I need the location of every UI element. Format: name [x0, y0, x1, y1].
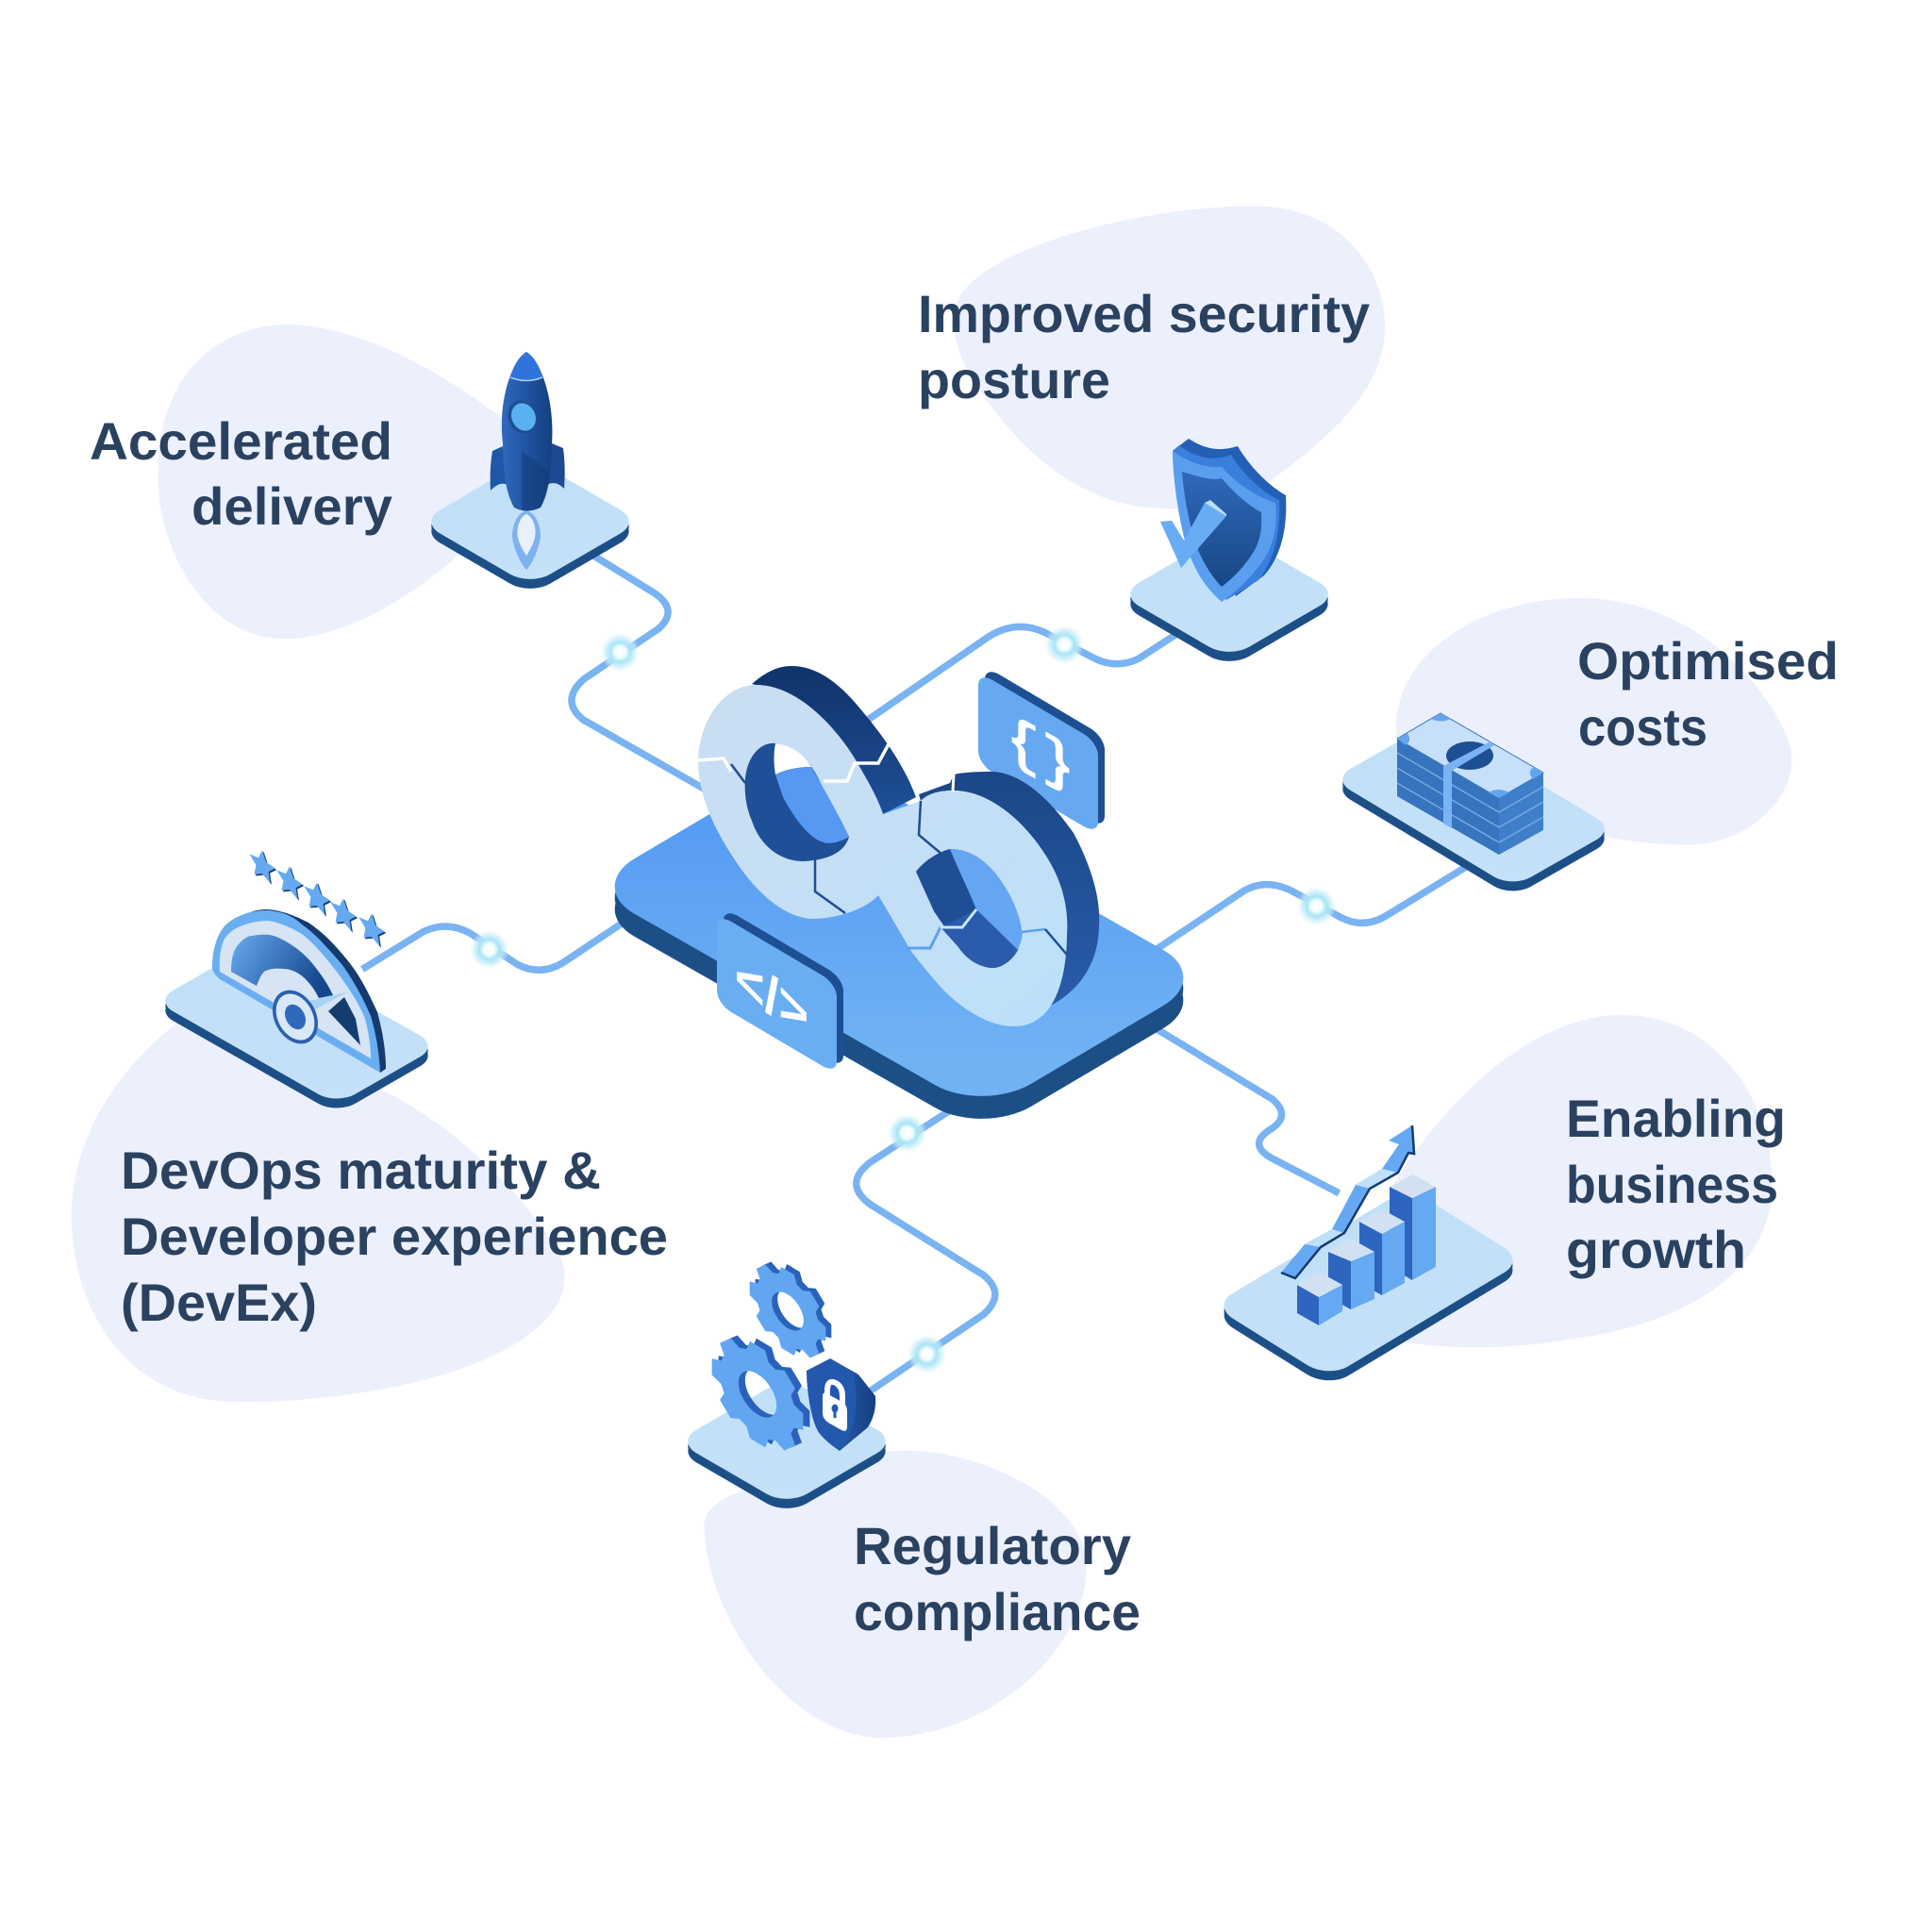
platform: rocket [420, 458, 641, 595]
gauge arc [231, 935, 333, 998]
label: devops maturity and developer experience [121, 1141, 668, 1332]
right hole platform [950, 849, 1022, 950]
infinity ring [698, 666, 1099, 1026]
gauge hub [263, 982, 327, 1052]
rocket nose [510, 352, 542, 381]
note corners [1397, 713, 1543, 798]
rocket body [502, 352, 552, 511]
note layer lines [1397, 753, 1543, 842]
upper gear [750, 1246, 831, 1374]
bar 3 [1359, 1209, 1405, 1295]
glowing nodes [470, 625, 1336, 1374]
shield check [1162, 521, 1184, 552]
rocket flame [512, 510, 541, 570]
rocket fins [491, 446, 509, 491]
connector: growth [1143, 1021, 1339, 1193]
label: enabling business growth [1566, 1089, 1786, 1279]
label: optimised costs [1577, 631, 1839, 757]
label: devops maturity and developer experience: DevOps maturity & [121, 1141, 601, 1200]
connector: shield [861, 626, 1176, 724]
padlock [827, 1382, 842, 1407]
ring back band right [919, 772, 1099, 1014]
blob: regulatory compliance [704, 1451, 1087, 1738]
right hole wall [916, 849, 1022, 968]
label: enabling business growth: growth [1566, 1220, 1746, 1279]
label: optimised costs: Optimised [1577, 631, 1839, 691]
notes left side [1397, 739, 1499, 855]
label: enabling business growth: business [1566, 1155, 1778, 1214]
platform: compliance [676, 1377, 897, 1515]
label: accelerated delivery: delivery [192, 476, 392, 536]
left hole wall [745, 743, 849, 861]
ring circuit lines [698, 741, 1067, 955]
connector: money [1143, 866, 1468, 958]
bar 4 [1390, 1174, 1436, 1280]
background blobs [72, 206, 1791, 1738]
notes right side [1499, 773, 1543, 855]
note top face [1397, 713, 1543, 798]
connector: rocket [572, 556, 715, 795]
gauge back edge [248, 909, 386, 1073]
label: devops maturity and developer experience: (DevEx) [121, 1273, 317, 1332]
left hole platform [775, 767, 849, 843]
label: enabling business growth: Enabling [1566, 1089, 1786, 1148]
card: curly braces [978, 666, 1105, 835]
gauge rim [212, 910, 380, 1073]
label: improved security posture [918, 284, 1370, 409]
label: devops maturity and developer experience: Developer experience [121, 1207, 668, 1266]
label: improved security posture: posture [918, 350, 1110, 409]
icon: braces: {} [1007, 705, 1074, 806]
blob: enabling growth [1381, 1015, 1773, 1347]
icon: growth chart [1281, 1125, 1436, 1325]
icon: banknotes [1397, 713, 1543, 855]
shield inner [1182, 472, 1261, 587]
label: regulatory compliance [854, 1516, 1141, 1641]
icon: gears and lock [713, 1246, 875, 1469]
gauge needle [305, 992, 347, 1012]
right hole lower wall [941, 909, 1018, 968]
rocket body fold [522, 451, 550, 511]
rocket porthole [503, 395, 542, 439]
main platform [587, 752, 1211, 1135]
gauge dark segment [328, 997, 360, 1045]
label: accelerated delivery: Accelerated [90, 411, 392, 471]
left hole background [774, 743, 811, 774]
label: accelerated delivery [90, 411, 392, 536]
note medallion [1446, 741, 1493, 770]
connector lines [362, 556, 1468, 1391]
shield front [1173, 451, 1276, 602]
platform: growth [1212, 1188, 1524, 1388]
bar 2 [1328, 1239, 1374, 1309]
ring back band left [752, 666, 916, 814]
label: regulatory compliance: compliance [854, 1582, 1141, 1641]
icon: shield [1160, 439, 1286, 602]
blob: improved security [955, 206, 1385, 508]
icon: code brackets: </> [735, 942, 808, 1049]
connector: gauge [362, 908, 644, 970]
connector: compliance [857, 1103, 995, 1391]
blob: accelerated delivery [158, 325, 518, 639]
lower gear [713, 1317, 808, 1469]
growth arrow [1281, 1125, 1414, 1278]
note paper band [1443, 741, 1494, 828]
platform: money [1332, 721, 1615, 897]
shield back layers [1173, 439, 1286, 596]
platform: gauge [155, 942, 439, 1114]
gauge dial [220, 921, 371, 1058]
card: code tag [717, 908, 843, 1074]
rating stars [249, 843, 386, 951]
icon: gauge and stars [212, 843, 386, 1073]
icon: rocket [491, 352, 565, 570]
ring front face [698, 685, 1067, 1026]
bar 1 [1297, 1272, 1342, 1325]
blob: devops maturity [72, 1018, 565, 1402]
blob: optimised costs [1396, 598, 1791, 845]
label: optimised costs: costs [1578, 697, 1707, 757]
label: improved security posture: Improved security [918, 284, 1370, 343]
lock shield [807, 1358, 875, 1451]
label: regulatory compliance: Regulatory [854, 1516, 1131, 1575]
platform: shield [1119, 530, 1340, 668]
